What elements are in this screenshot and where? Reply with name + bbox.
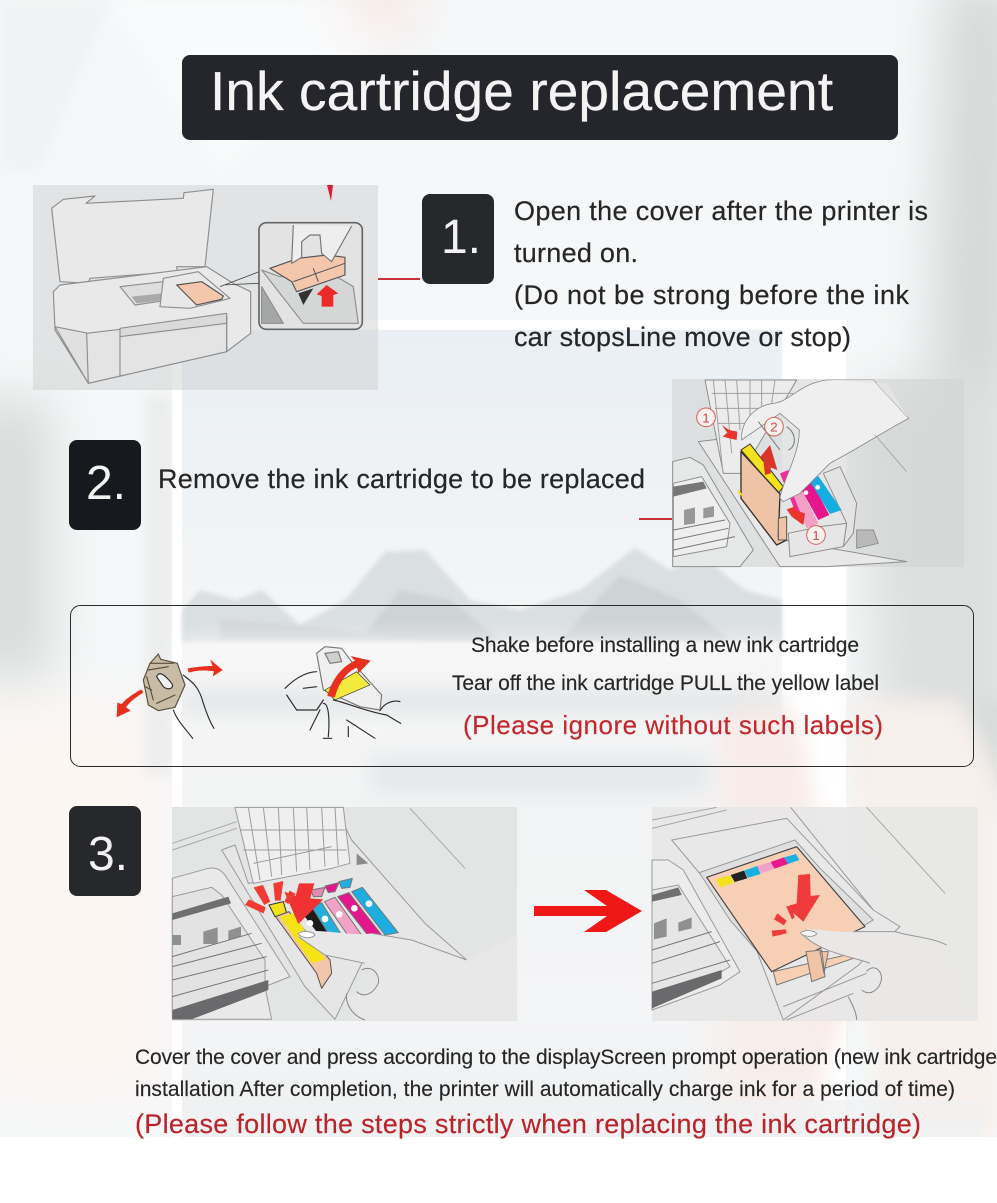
closing instructions: (Please follow the steps strictly when replacing the ink cartridge): [135, 1109, 921, 1139]
notice text: Shake before installing a new ink cartridge: [471, 634, 859, 657]
step 1 number badge: 1.: [441, 211, 481, 264]
notice text: [452, 634, 883, 740]
step 3 number badge: [69, 806, 141, 896]
title bar: [182, 55, 898, 140]
step 1 number badge: [422, 194, 494, 284]
closing instructions: installation After completion, the printer will automatically charge ink for a period of time): [135, 1078, 955, 1101]
step 1 instructions: turned on.: [514, 238, 638, 268]
step 2 illustration: removing cartridge: 2: [770, 420, 778, 435]
step 1 instructions: Open the cover after the printer is: [514, 196, 928, 226]
closing instructions: [135, 1046, 997, 1139]
step 1 instructions: (Do not be strong before the ink: [514, 280, 910, 310]
step 3 number badge: 3.: [88, 828, 128, 881]
step 3 illustration: inserting cartridge: [172, 807, 517, 1021]
step 2 illustration: removing cartridge: [672, 379, 964, 567]
step 2 number badge: [69, 440, 141, 530]
step 1 instructions: [514, 196, 928, 352]
notice text: Tear off the ink cartridge PULL the yellow label: [452, 672, 879, 695]
closing instructions: Cover the cover and press according to the displayScreen prompt operation (new ink cartridge: [135, 1046, 997, 1069]
step 1 instructions: car stopsLine move or stop): [514, 322, 851, 352]
step 2 number badge: 2.: [86, 457, 126, 510]
step 2 illustration: removing cartridge: 1: [702, 410, 710, 425]
icon: shaking cartridge in hand: [117, 654, 223, 738]
arrow: step 3 sequence: [534, 890, 642, 932]
decorative red wedge: [327, 185, 333, 201]
step 2 instruction: Remove the ink cartridge to be replaced: [158, 464, 645, 494]
icon: pulling yellow label: [285, 647, 401, 738]
notice text: (Please ignore without such labels): [463, 710, 883, 740]
step 3 illustration: closing cartridge cover: [652, 807, 978, 1021]
connector line: step 2: [639, 518, 672, 520]
step 1 illustration: printer with open cover: [33, 185, 378, 390]
step 2 illustration: removing cartridge: 1: [812, 528, 820, 543]
panel: shake and tear notice: [70, 606, 974, 766]
connector line: step 1: [378, 278, 420, 280]
title text: Ink cartridge replacement: [210, 60, 833, 122]
